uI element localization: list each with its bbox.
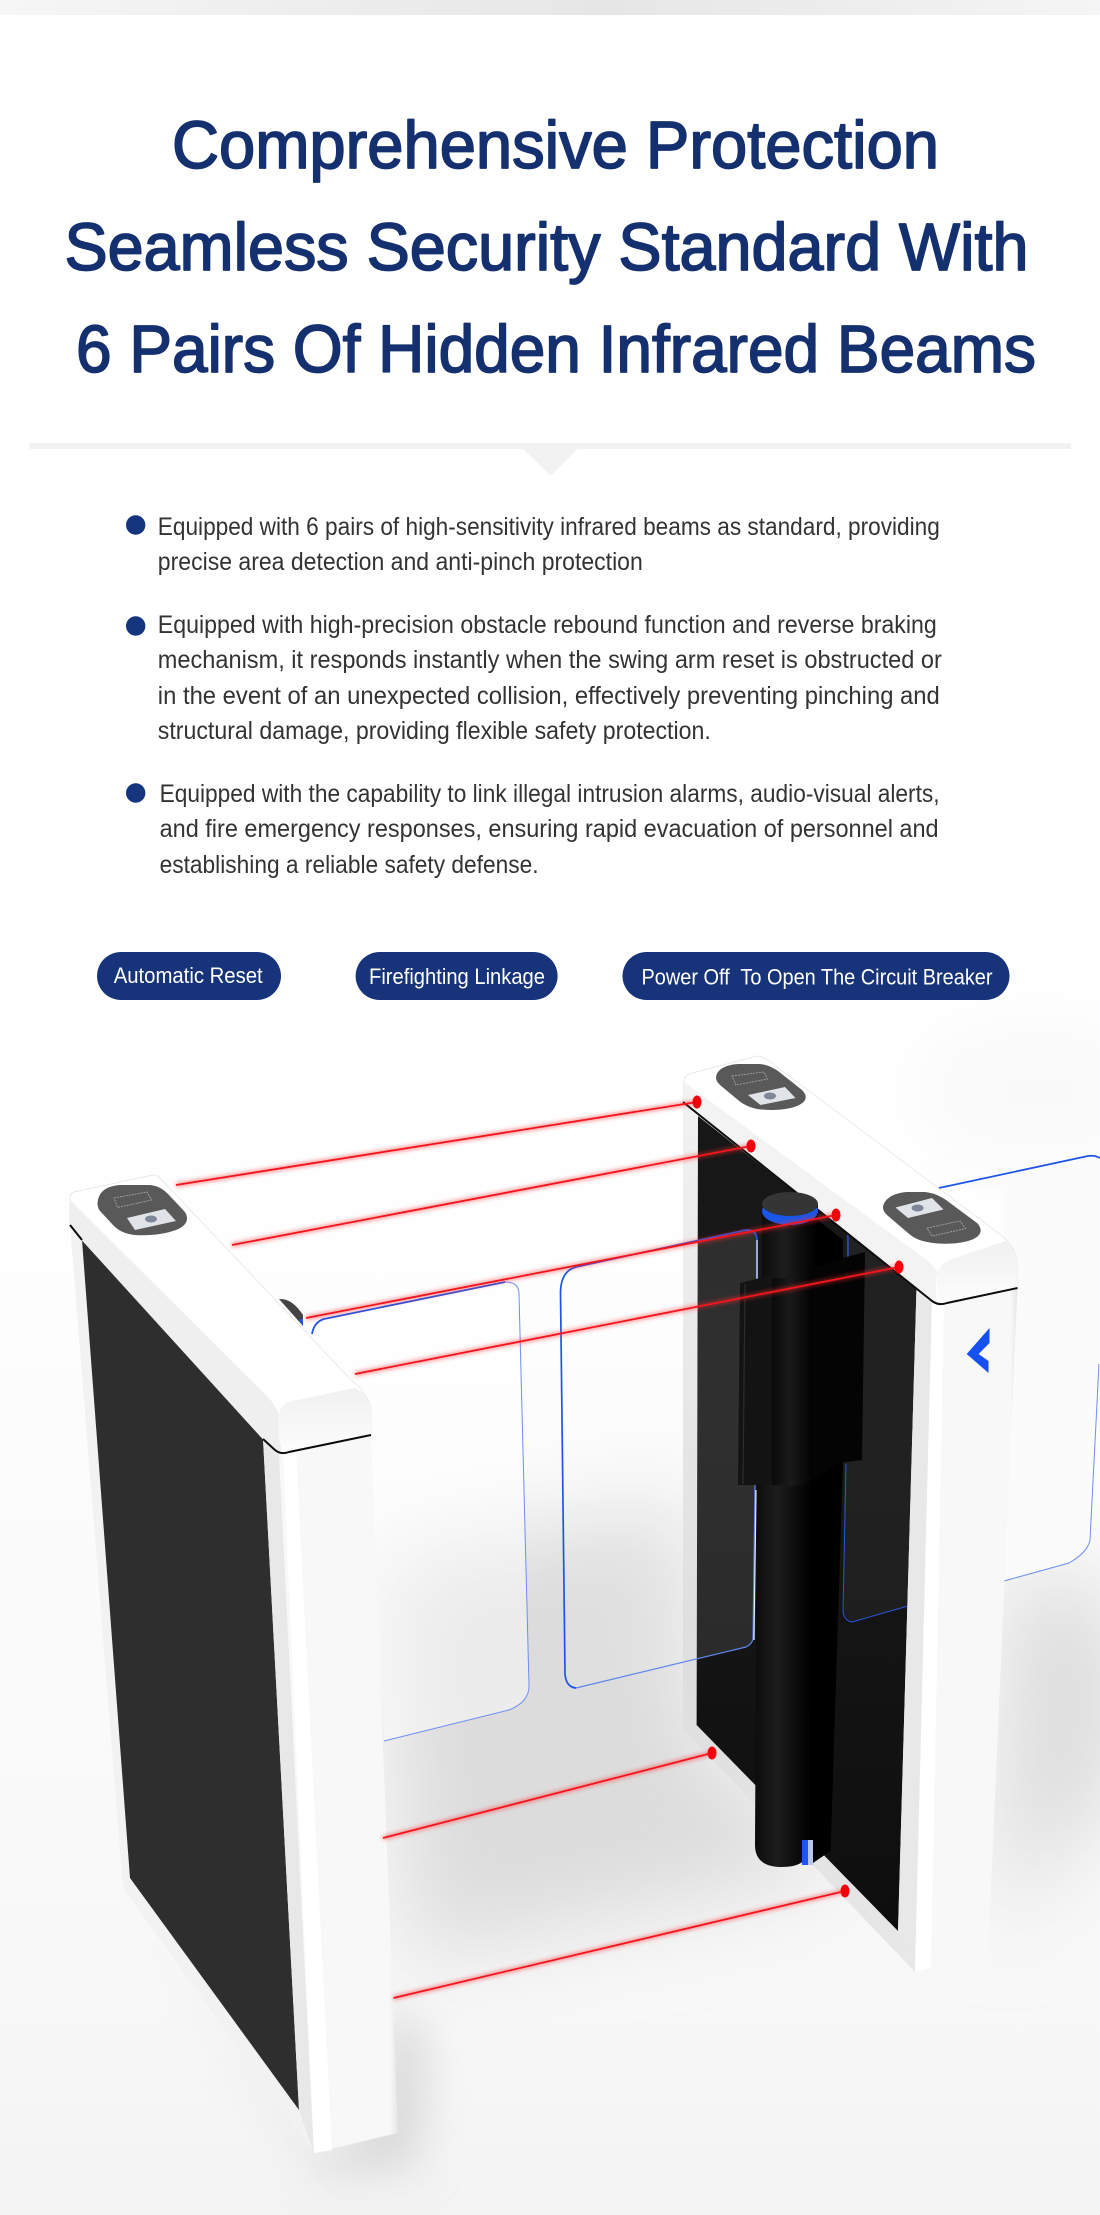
divider with pointer xyxy=(30,443,1071,476)
reader pad: left post xyxy=(98,1185,187,1235)
feature 2: structural damage, providing flexible safety protection. xyxy=(158,717,711,745)
collar xyxy=(772,1278,812,1486)
blue light band xyxy=(762,1197,818,1225)
feature 3: Equipped with the capability to link illegal intrusion alarms, audio-visual alerts, xyxy=(160,780,940,808)
lower pole xyxy=(755,1470,812,1867)
feature 1 xyxy=(126,513,940,576)
left post xyxy=(70,1175,398,2153)
feature 2: Equipped with high-precision obstacle rebound function and reverse braking xyxy=(158,611,937,639)
right post back strip xyxy=(683,1102,936,1972)
infrared beams xyxy=(176,1096,904,1998)
swing arm pole xyxy=(755,1192,843,1867)
hinge bracket xyxy=(738,1252,865,1486)
pole cap xyxy=(762,1192,818,1216)
feature 2: in the event of an unexpected collision, effectively preventing pinching and xyxy=(158,682,940,710)
left post dark panel xyxy=(82,1240,299,2110)
right post top cap xyxy=(683,1056,1018,1304)
badge: automatic reset xyxy=(97,952,281,1000)
left post front face xyxy=(263,1435,398,2153)
feature 3: and fire emergency responses, ensuring rapid evacuation of personnel and xyxy=(160,815,939,843)
turnstile illustration xyxy=(70,1056,1100,2180)
far glass swing panel xyxy=(939,1156,1100,1581)
right tab xyxy=(812,1252,865,1480)
left post top cap xyxy=(70,1175,371,1453)
left post rear knob xyxy=(279,1299,303,1326)
title: 6 Pairs Of Hidden Infrared Beams xyxy=(76,312,1036,387)
title: Seamless Security Standard With xyxy=(64,210,1028,285)
feature 3: establishing a reliable safety defense. xyxy=(160,851,539,879)
middle glass swing panel xyxy=(560,1230,757,1688)
beam lines xyxy=(176,1102,899,1998)
badge: firefighting linkage xyxy=(356,952,558,1000)
left post outer frame xyxy=(70,1225,314,2153)
feature 2: mechanism, it responds instantly when the swing arm reset is obstructed or xyxy=(158,646,942,674)
title: Comprehensive Protection xyxy=(172,108,939,183)
right post xyxy=(683,1056,1018,1972)
beam glow xyxy=(176,1102,899,1998)
badge: firefighting linkage: Firefighting Linkage xyxy=(369,964,545,989)
reader pad: front xyxy=(883,1192,981,1244)
left tab xyxy=(738,1275,772,1485)
feature list xyxy=(126,513,942,879)
upper pole xyxy=(762,1205,818,1295)
third glass panel tint xyxy=(843,1232,916,1622)
feature 1: Equipped with 6 pairs of high-sensitivity infrared beams as standard, providing xyxy=(158,513,940,541)
beam emitter dots xyxy=(692,1096,904,1898)
floor and wall shadows xyxy=(130,1500,1100,2180)
reader pad: back xyxy=(716,1064,806,1110)
badge: automatic reset: Automatic Reset xyxy=(114,963,263,988)
top grey strip xyxy=(0,0,1100,15)
title xyxy=(64,108,1036,387)
badge: power off xyxy=(622,952,1010,1000)
right post dark panel xyxy=(697,1116,916,1931)
right post front face xyxy=(898,1288,1018,1972)
badge: power off: Power Off To Open The Circuit Breaker xyxy=(642,964,992,990)
blue base accent xyxy=(802,1840,813,1865)
icon: blue direction chevron xyxy=(967,1328,990,1373)
feature 2 xyxy=(126,611,942,745)
feature 1: precise area detection and anti-pinch protection xyxy=(158,548,643,576)
left glass swing panel xyxy=(312,1282,529,1741)
feature 3 xyxy=(126,780,940,879)
black shadow band xyxy=(806,1220,843,1865)
